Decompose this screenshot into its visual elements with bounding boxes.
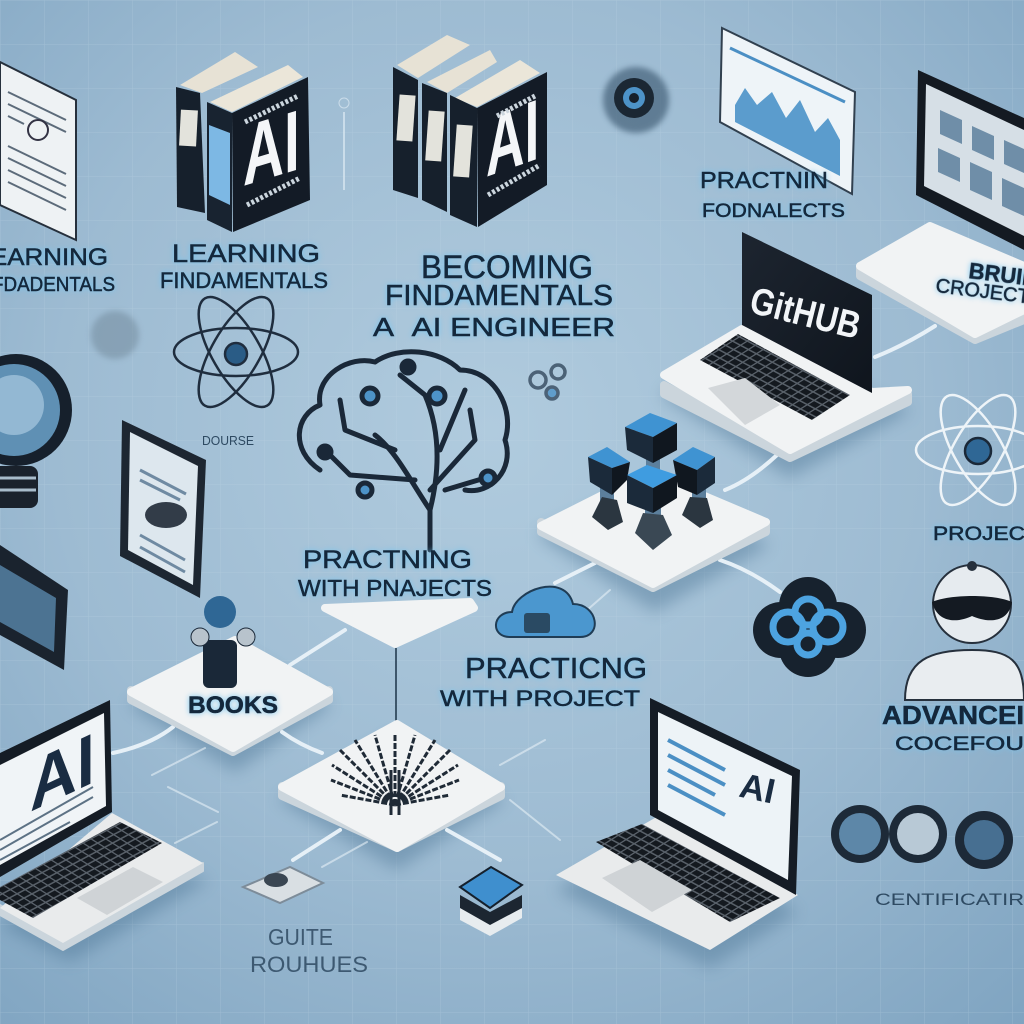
icon: certificate badges: [831, 805, 1013, 869]
text: advanced: [882, 700, 1024, 755]
text: guide routes: ROUHUES: [250, 952, 368, 977]
icon: AI books left: AI: [243, 91, 300, 205]
icon: robot: [905, 561, 1024, 700]
text: learning fundamentals left: [0, 244, 115, 296]
icon: brain circuit: [299, 352, 508, 550]
icon: tablet: [120, 420, 206, 598]
text: practicing with projects: WITH PNAJECTS: [298, 575, 492, 601]
text: learning fundamentals: LEARNING: [172, 240, 320, 268]
vertical connector: [395, 648, 397, 722]
icon: lightbulb: [0, 354, 72, 508]
title: BECOMING: [421, 249, 593, 285]
panel: books platform: [131, 596, 329, 752]
panel: upper platform: [325, 602, 474, 644]
text: project: PROJEC: [933, 524, 1024, 545]
icon: blue cloud: [496, 587, 595, 637]
icon: laptop AI left: AI: [30, 718, 95, 828]
icon: faded swirl: [91, 311, 139, 359]
icon: cloud network: [753, 577, 866, 677]
panel: neural tree platform: [282, 724, 501, 848]
icon: AI books centre: AI: [486, 81, 539, 196]
icon: laptop github: GitHUB: [746, 280, 865, 348]
text: guide routes: GUITE: [268, 924, 333, 950]
panel: cubes platform: [541, 413, 766, 588]
icon: stack: [460, 867, 522, 936]
icon: atom right: [916, 384, 1024, 516]
panel: document top left: [0, 62, 76, 240]
icon: laptop AI left: [0, 700, 203, 950]
icon: laptop AI right: AI: [736, 766, 779, 811]
icon: laptop github: [664, 232, 908, 458]
icon: laptop AI right: [556, 698, 800, 950]
text: certification: CENTIFICATIR: [875, 890, 1024, 909]
icon: seal top centre: [603, 67, 669, 133]
platform shadows: [0, 345, 912, 968]
text: practicing with project: PRACTICNG: [465, 653, 647, 685]
icon: small device: [243, 867, 323, 903]
text: practicing with projects: PRACTNING: [303, 546, 472, 574]
icon: AI books centre: [393, 35, 547, 227]
text: advanced: ADVANCEI: [882, 700, 1024, 730]
text: practicing with projects: [298, 546, 492, 601]
panel: monitor left: [0, 545, 68, 670]
icon: atom left: [174, 286, 298, 418]
text: practicing projects: [700, 167, 845, 222]
panel: chart screen top right: [720, 28, 855, 194]
text: practicing with project: [440, 653, 647, 711]
connector lines: [113, 326, 935, 867]
panel: building projects: [860, 226, 1024, 340]
text: advanced: COCEFOU: [895, 734, 1024, 755]
text: practicing with project: WITH PROJECT: [440, 686, 640, 711]
title: [373, 249, 615, 342]
text: learning fundamentals: FINDAMENTALS: [160, 268, 328, 293]
icon: small gears: [530, 365, 565, 399]
title: A AI ENGINEER: [373, 312, 615, 342]
title: FINDAMENTALS: [385, 280, 613, 312]
icon: AI books left: [176, 52, 310, 232]
decorative pin: [339, 98, 349, 190]
panel: monitor top right: [916, 70, 1024, 250]
text: practicing projects: PRACTNIN: [700, 167, 828, 193]
panel: books platform: BOOKS: [188, 692, 278, 719]
text: course: DOURSE: [202, 433, 254, 448]
text: practicing projects: FODNALECTS: [702, 201, 845, 222]
text: guide routes: [250, 924, 368, 977]
text: learning fundamentals: [160, 240, 328, 293]
